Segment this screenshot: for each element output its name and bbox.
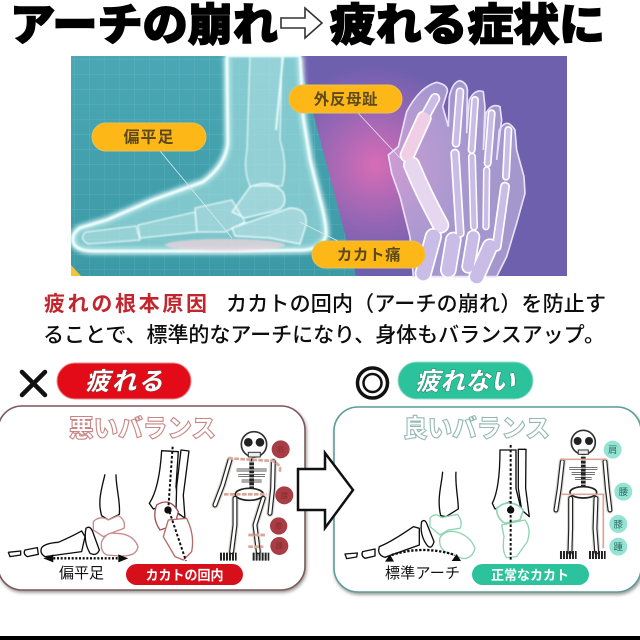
diagram: upright heel (492, 445, 529, 560)
diagram: flat foot bones (8, 474, 138, 562)
callout: カカト痛: カカト痛 (337, 246, 401, 264)
label pill: 疲れる: 疲れる (84, 368, 168, 396)
badges: pain points: 踵 (276, 542, 283, 551)
callout line: 外反母趾 (358, 113, 400, 158)
text block: explanation: 疲れの根本原因 (44, 293, 207, 316)
heading: 良いバランス: 良いバランス (403, 415, 550, 443)
badges: pain points: 腰 (281, 491, 289, 500)
badges: pain points: 膝 (275, 522, 283, 531)
diagram: aligned skeleton (556, 430, 610, 555)
callout: 外反母趾: 外反母趾 (314, 90, 378, 108)
diagram: misaligned skeleton (215, 432, 280, 557)
title (10, 1, 605, 50)
label pill: カカトの回内: カカトの回内 (146, 567, 224, 583)
callout line: カカト痛 (300, 222, 340, 242)
badges: body parts: 腰 (619, 487, 628, 497)
text block: explanation: ることで、標準的なアーチになり、身体もバランスアップ。 (43, 324, 605, 347)
illustration: bunion foot top view (388, 81, 525, 277)
icon: title arrow (281, 8, 322, 38)
heading: 悪いバランス: 悪いバランス (69, 415, 216, 443)
icon: double circle (358, 368, 388, 398)
text block: explanation: カカトの回内（アーチの崩れ）を防止す (226, 293, 606, 316)
text block: explanation (43, 293, 606, 347)
diagram: healthy arch bones (345, 472, 475, 562)
title: アーチの崩れ (10, 1, 278, 50)
title: 疲れる症状に (330, 1, 605, 50)
diagram: inward-tilted heel (149, 447, 193, 561)
badges: body parts: 膝 (614, 518, 624, 529)
panel: foot x-ray illustration (71, 56, 567, 277)
label pill: カカトの回内 (126, 564, 243, 585)
badges: body parts: 肩 (608, 445, 617, 455)
panel: good balance (334, 407, 640, 592)
arrow: bad to good (298, 453, 353, 528)
label: 偏平足: 偏平足 (59, 565, 104, 582)
badges: pain points (270, 440, 293, 555)
callout line: 偏平足 (160, 151, 232, 238)
callout: 外反母趾 (289, 85, 402, 113)
callout: 偏平足 (92, 123, 206, 151)
label pill: 疲れる (57, 363, 191, 399)
panel: bad balance (0, 406, 305, 590)
badges: body parts (604, 441, 632, 556)
label pill: 正常なカカト: 正常なカカト (491, 568, 569, 583)
badges: body parts: 踵 (614, 541, 623, 552)
badges: pain points: 肩 (277, 445, 284, 454)
label pill: 疲れない: 疲れない (414, 368, 520, 396)
label pill: 疲れない (398, 362, 533, 399)
callout: カカト痛 (312, 241, 425, 268)
label pill: 正常なカカト (472, 564, 589, 585)
bottom bar (0, 636, 640, 640)
illustration: flat foot side view (73, 56, 326, 251)
callout: 偏平足: 偏平足 (123, 128, 175, 146)
label: 標準アーチ: 標準アーチ (385, 565, 460, 582)
icon: cross mark (22, 372, 45, 395)
